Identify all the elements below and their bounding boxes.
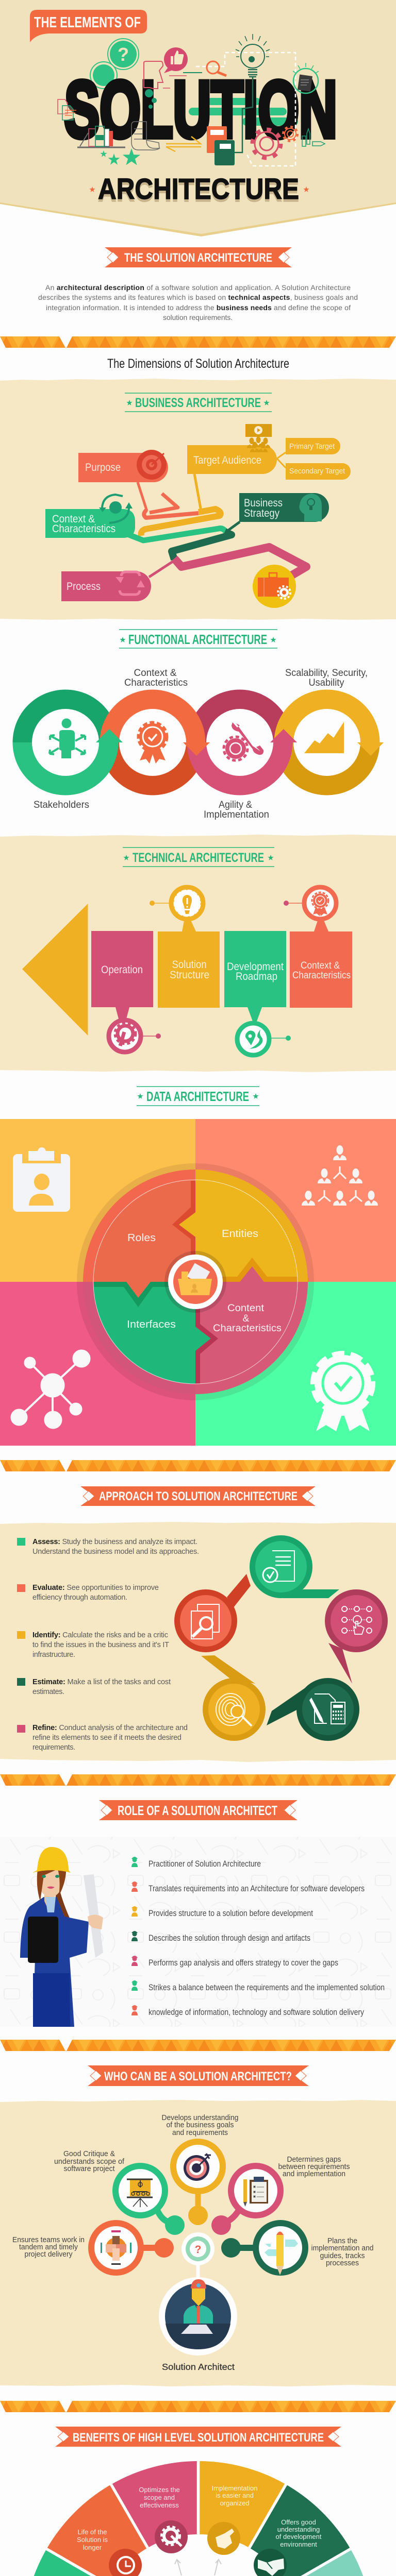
heading: functional architecture xyxy=(119,630,277,648)
pin: operation gear xyxy=(109,1020,161,1052)
box: secondary target: Secondary Target xyxy=(289,467,345,476)
intro paragraph: solution requirements. xyxy=(163,313,233,321)
icon: stars xyxy=(100,148,140,165)
ring labels: Characteristics xyxy=(124,677,188,688)
list: identify: infrastructure. xyxy=(32,1651,75,1659)
icon: question bubble: ? xyxy=(118,44,129,65)
box: secondary target xyxy=(286,463,351,480)
heading: the dimensions: The Dimensions of Solution Architecture xyxy=(107,357,289,371)
item: performs: Performs gap analysis and offers strategy to cover the gaps xyxy=(148,1958,338,1968)
intro paragraph: describes the systems and its features which is based on technical aspects, business goals and xyxy=(38,293,358,301)
segment text: implementation xyxy=(212,2484,257,2507)
segment text: optimizes: scope and xyxy=(144,2494,175,2501)
list: assess: Assess: Study the business and analyze its impact. xyxy=(32,1538,197,1546)
question circle: ? xyxy=(195,2244,201,2256)
ring labels: Implementation xyxy=(204,809,269,820)
segment text: life: longer xyxy=(83,2544,102,2551)
list: assess: Understand the business model and its approaches. xyxy=(32,1548,199,1556)
pin: roadmap xyxy=(237,1023,291,1055)
dashed white frame xyxy=(196,53,295,166)
list: assess xyxy=(17,1538,199,1556)
list: evaluate xyxy=(17,1584,159,1602)
pin labels: Develops understanding xyxy=(162,2114,238,2122)
icon: wrench and gear xyxy=(224,722,263,760)
block: operation xyxy=(91,931,153,1023)
icon: documents xyxy=(58,99,76,120)
pin: chart board xyxy=(116,2166,185,2235)
pin labels: Good Critique & xyxy=(63,2150,115,2158)
icon: solution architect xyxy=(159,2277,237,2355)
block: development roadmap: Roadmap xyxy=(236,971,277,982)
list: identify: Identify: Calculate the risks and be a critic xyxy=(32,1631,168,1639)
ring labels: Stakeholders xyxy=(34,800,89,810)
stripe divider xyxy=(0,336,396,348)
bubble: assess document xyxy=(250,1535,339,1598)
bubble: refine nodes xyxy=(325,1589,388,1684)
pin labels: tandem and timely xyxy=(19,2243,78,2251)
box: context and characteristics: Characteristics xyxy=(52,523,116,535)
icon: exchange arrows xyxy=(166,137,201,151)
chart: data wheel: & xyxy=(243,1313,250,1324)
box: context and characteristics xyxy=(45,495,135,538)
chart: data wheel: Content xyxy=(227,1303,265,1314)
box: purpose: Purpose xyxy=(85,462,121,473)
pin labels: and implementation xyxy=(283,2170,345,2178)
icon: pencils xyxy=(302,129,325,146)
list: identify xyxy=(17,1631,169,1659)
box: process: Process xyxy=(67,581,101,592)
doodle background xyxy=(0,1837,396,2027)
item: describes xyxy=(131,1931,310,1943)
segment text: life: Solution is xyxy=(77,2536,108,2544)
box: target audience xyxy=(187,424,277,474)
badge: the elements of: THE ELEMENTS OF xyxy=(34,14,141,31)
icon: award badge xyxy=(313,1353,373,1431)
block: development roadmap: Development xyxy=(227,961,284,973)
heading: data architecture: DATA ARCHITECTURE xyxy=(146,1089,249,1104)
icon: green notebook xyxy=(214,140,235,165)
icon: light bulb and wire xyxy=(234,34,270,152)
ribbon: the solution architecture: THE SOLUTION ARCHITECTURE xyxy=(124,251,272,265)
panel: technical architecture background xyxy=(0,835,396,1072)
ribbon: approach xyxy=(80,1486,316,1506)
icon: briefcase circle xyxy=(253,565,296,608)
icon: rising chart xyxy=(304,722,344,753)
pin: idea xyxy=(150,887,203,919)
bubble: evaluate documents xyxy=(174,1574,251,1652)
pin: teamwork xyxy=(91,2223,174,2273)
segment text: offers: Offers good xyxy=(281,2518,316,2526)
flow route connectors xyxy=(129,452,306,577)
label: solution architect: Solution Architect xyxy=(162,2362,235,2372)
item: provides: Provides structure to a solution before development xyxy=(148,1909,313,1918)
box: primary target xyxy=(286,438,340,454)
center folder xyxy=(164,1251,226,1313)
list: evaluate: Evaluate: See opportunities to improve xyxy=(32,1584,159,1592)
ribbon: who can be xyxy=(88,2065,309,2086)
icon: books on a shelf xyxy=(77,126,125,147)
pin labels: Plans the xyxy=(327,2237,357,2245)
title: architecture: ARCHITECTURE xyxy=(98,175,299,208)
list: estimate: estimates. xyxy=(32,1688,64,1696)
icon: stakeholder xyxy=(50,718,85,758)
chart: data wheel: Roles xyxy=(127,1232,156,1244)
ring labels xyxy=(34,668,368,820)
ribbon: approach: APPROACH TO SOLUTION ARCHITECTURE xyxy=(99,1489,298,1503)
question circle xyxy=(182,2232,214,2278)
box: primary target: Primary Target xyxy=(289,443,335,451)
ring labels: Agility & xyxy=(219,800,252,810)
item: describes: Describes the solution through design and artifacts xyxy=(148,1934,310,1943)
pin labels: software project xyxy=(64,2165,114,2173)
pin: signpost pencil xyxy=(221,2223,305,2275)
block: context and characteristics: Context & xyxy=(301,960,340,971)
segment text: offers: environment xyxy=(280,2540,317,2548)
block: context and characteristics: Characteristics xyxy=(292,970,351,981)
chart: interlinked rings xyxy=(12,689,384,795)
panel: who background xyxy=(0,2100,396,2386)
box: context and characteristics: Context & xyxy=(52,513,95,525)
ribbon: benefits xyxy=(55,2427,341,2447)
chart: data wheel xyxy=(77,1163,314,1400)
list: estimate xyxy=(17,1678,171,1696)
icon: face outline xyxy=(144,61,163,89)
intro paragraph xyxy=(38,283,358,321)
icon: magnifier and lines xyxy=(163,61,226,88)
heading: technical architecture: TECHNICAL ARCHITECTURE xyxy=(133,851,264,865)
pin: clipboard xyxy=(211,2166,280,2235)
segment text: offers: understanding xyxy=(277,2526,320,2533)
intro paragraph: integration information. It is intended to address the business needs and define the scope of xyxy=(46,303,351,312)
chart: data wheel: Interfaces xyxy=(127,1319,176,1330)
icon: thumbs xyxy=(207,2522,240,2555)
segment text: optimizes xyxy=(139,2486,180,2509)
list: estimate: Estimate: Make a list of the tasks and cost xyxy=(32,1678,171,1686)
list: refine: Refine: Conduct analysis of the architecture and xyxy=(32,1724,188,1732)
heading: data architecture xyxy=(137,1087,259,1106)
icon: thumbs-up bubble xyxy=(164,47,188,73)
segment text: implementation: organized xyxy=(220,2499,250,2507)
decorative dots xyxy=(145,89,157,109)
list: refine: refine its elements to see if it meets the desired xyxy=(32,1734,182,1742)
list: refine xyxy=(17,1724,188,1752)
segment text: offers xyxy=(276,2518,322,2548)
icon: orange notebook xyxy=(207,126,227,153)
item: provides xyxy=(131,1906,313,1918)
arrows: to segments xyxy=(121,2560,275,2576)
pin labels: guides, tracks xyxy=(320,2252,365,2260)
heading: business architecture xyxy=(125,393,272,412)
icon: network xyxy=(11,1350,90,1429)
intro paragraph: An architectural description of a software solution and application. A Solution Architecture xyxy=(45,283,351,292)
pin labels: between requirements xyxy=(278,2163,350,2171)
icon: gears xyxy=(252,127,298,158)
illustration: woman architect xyxy=(20,1847,103,2027)
item: practitioner: Practitioner of Solution Architecture xyxy=(148,1859,261,1869)
block: development roadmap xyxy=(224,931,286,1023)
chart: data wheel: Entities xyxy=(222,1228,258,1240)
panel: business architecture background xyxy=(0,379,396,620)
icon: badge xyxy=(138,722,167,764)
box: target audience: Target Audience xyxy=(193,454,261,466)
item: knowledge: knowledge of information, technology and software solution delivery xyxy=(148,2008,365,2017)
block: solution structure: Structure xyxy=(170,969,209,981)
block: operation: Operation xyxy=(101,964,143,976)
pin labels: understands scope of xyxy=(54,2158,125,2166)
list: refine: requirements. xyxy=(32,1743,75,1752)
pin labels: Ensures teams work in xyxy=(12,2236,85,2244)
pin: badge xyxy=(284,887,336,919)
box: business strategy: Business xyxy=(244,497,283,509)
segment text: implementation: is easier and xyxy=(216,2492,254,2499)
icon: scroll xyxy=(131,122,159,150)
stripe divider xyxy=(0,2401,396,2412)
icon: people hierarchy xyxy=(302,1145,378,1206)
block: solution structure: Solution xyxy=(172,959,206,971)
bubble: estimate calculator xyxy=(267,1678,359,1741)
pin labels: of the business goals xyxy=(166,2121,234,2129)
icon: gear wrench xyxy=(155,2520,188,2553)
icon: bulb badge with document xyxy=(293,63,319,93)
pin: target xyxy=(173,2142,223,2225)
ribbon: role of a solution architect xyxy=(99,1800,298,1820)
ring labels: Scalability, Security, xyxy=(285,668,368,679)
pin labels: and requirements xyxy=(172,2129,228,2137)
panel: data architecture tiles xyxy=(0,1119,396,1446)
block: solution structure xyxy=(158,918,220,1008)
icon: handshake xyxy=(254,2549,287,2576)
chart: data wheel: Characteristics xyxy=(213,1323,282,1334)
panel: approach background xyxy=(0,1522,396,1762)
pin labels: implementation and xyxy=(311,2244,373,2252)
ring labels: Context & xyxy=(134,668,177,679)
stripe divider xyxy=(0,1774,396,1786)
box: business strategy: Strategy xyxy=(244,507,279,519)
ribbon: benefits: BENEFITS OF HIGH LEVEL SOLUTION ARCHITECTURE xyxy=(73,2431,324,2445)
title: architecture: ARCHITECTURE xyxy=(98,173,299,206)
block: context and characteristics xyxy=(290,919,352,1008)
icon: question bubble xyxy=(108,39,139,70)
segment text: optimizes: effectiveness xyxy=(140,2501,179,2509)
badge: the elements of xyxy=(30,10,147,42)
segment text: optimizes: Optimizes the xyxy=(139,2486,180,2494)
ribbon: role of a solution architect: ROLE OF A SOLUTION ARCHITECT xyxy=(118,1803,277,1818)
segment text: implementation: Implementation xyxy=(212,2484,257,2492)
box: purpose xyxy=(78,450,168,482)
pin labels xyxy=(12,2114,373,2267)
heading: technical architecture xyxy=(123,848,274,867)
box: process xyxy=(61,571,151,601)
bubble: identify fingerprint xyxy=(201,1655,266,1741)
item: knowledge xyxy=(131,2005,365,2017)
chart: benefits semicircle xyxy=(23,2459,374,2576)
ring labels: Usability xyxy=(308,677,344,688)
header bars behind title xyxy=(189,98,298,126)
heading: functional architecture: FUNCTIONAL ARCHITECTURE xyxy=(128,632,267,647)
ribbon: who can be: WHO CAN BE A SOLUTION ARCHITECT? xyxy=(104,2070,292,2083)
arrow: technical head xyxy=(22,904,88,1036)
header banner background xyxy=(0,0,396,236)
heading: business architecture: BUSINESS ARCHITECTURE xyxy=(135,396,261,410)
item: translates xyxy=(131,1882,365,1893)
item: practitioner xyxy=(131,1857,261,1869)
box: business strategy xyxy=(239,493,329,522)
list: identify: to find the issues in the business and it's IT xyxy=(32,1641,169,1649)
pin labels: Determines gaps xyxy=(287,2156,341,2164)
list: role items xyxy=(131,1857,385,2017)
pin labels: processes xyxy=(326,2259,359,2267)
pin labels: project delivery xyxy=(25,2250,73,2259)
list: evaluate: efficiency through automation. xyxy=(32,1594,127,1602)
segment text: life: Life of the xyxy=(77,2528,107,2536)
stripe divider xyxy=(0,2040,396,2051)
ribbon: the solution architecture xyxy=(105,247,292,267)
stripe divider xyxy=(0,1460,396,1471)
segment text: life xyxy=(77,2528,108,2551)
icon: clock xyxy=(109,2549,142,2576)
icon: green circle xyxy=(90,62,117,89)
segment text: offers: of development xyxy=(276,2533,322,2540)
item: performs xyxy=(131,1956,338,1968)
icon: id card xyxy=(13,1147,70,1212)
